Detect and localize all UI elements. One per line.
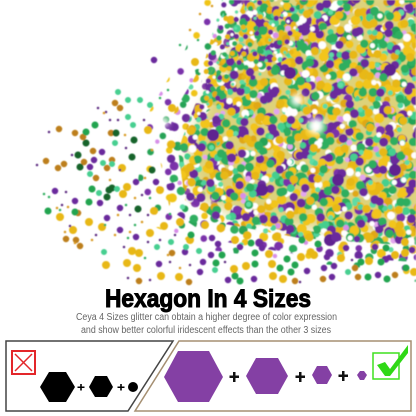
plus signs: [230, 371, 348, 382]
description: [76, 312, 337, 336]
light sparkles: [159, 94, 324, 134]
black hexagons: [40, 372, 138, 402]
purple clusters: [213, 70, 395, 240]
icon: red cross: [12, 351, 35, 374]
glitter pile: [37, 0, 416, 282]
dense glitter field: [138, 0, 416, 282]
description: and show better colorful iridescent effects than the other 3 sizes: [81, 325, 331, 336]
scattered dark-gold flakes: [46, 103, 395, 282]
panel: 3 sizes: [6, 341, 173, 411]
description: Ceya 4 Sizes glitter can obtain a higher degree of color expression: [76, 312, 337, 323]
title: Hexagon In 4 Sizes: [105, 285, 311, 313]
panel: 4 sizes: [135, 341, 411, 411]
fine specks: [37, 108, 352, 282]
icon: green check: [373, 345, 408, 379]
scattered gold flakes: [60, 62, 414, 279]
scattered dark green flakes: [78, 133, 152, 209]
scattered purple flakes: [55, 60, 412, 280]
purple hexagons: [164, 351, 367, 402]
scattered green flakes: [48, 125, 406, 281]
scattered teal flakes: [90, 92, 348, 272]
